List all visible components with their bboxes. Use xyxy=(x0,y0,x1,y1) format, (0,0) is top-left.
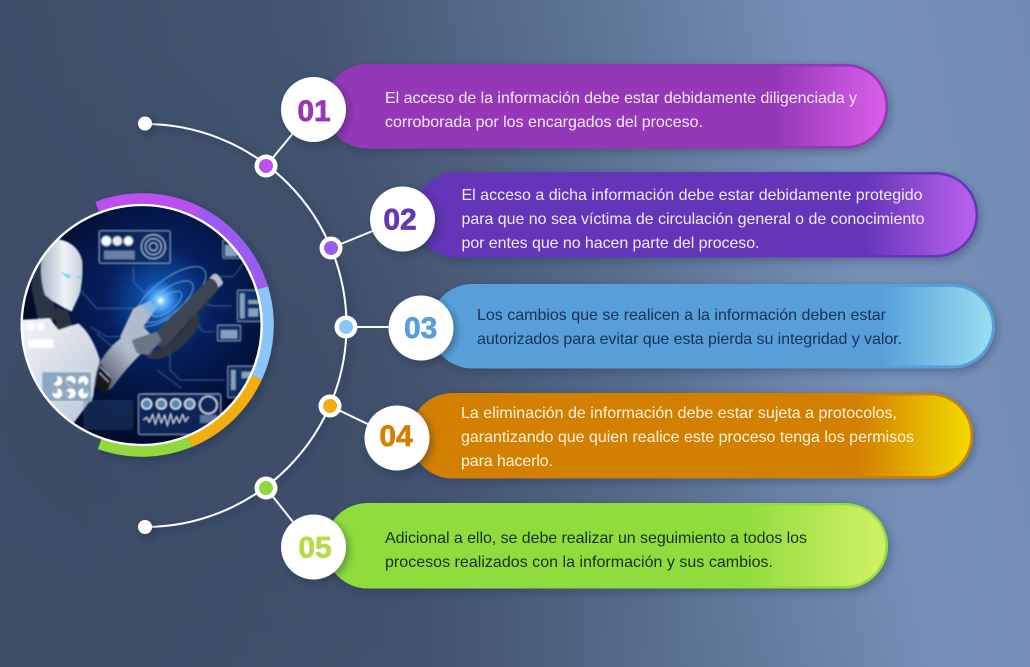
robot neck xyxy=(55,307,73,330)
photo white ring xyxy=(22,205,262,445)
step 5 text: procesos realizados con la información y sus cambios. xyxy=(385,554,773,571)
step 1 text: El acceso de la información debe estar debidamente diligenciada y xyxy=(385,90,857,107)
badge 01: 01 xyxy=(297,95,331,128)
step 5 text xyxy=(385,530,807,571)
chest holographic panel xyxy=(27,323,54,348)
step 2 text xyxy=(462,187,925,252)
badge 03 xyxy=(388,296,454,360)
robot arm and hand xyxy=(97,337,142,390)
robot torso xyxy=(17,318,100,423)
badge 02 xyxy=(370,186,435,252)
step 5 pill xyxy=(326,504,887,587)
robot head xyxy=(41,239,83,312)
step 2 text: por entes que no hacen parte del proceso. xyxy=(462,235,760,252)
node 1 xyxy=(254,154,278,178)
step 4 text: para hacerlo. xyxy=(461,453,553,470)
robot back of head xyxy=(32,250,57,320)
rings on tablet xyxy=(137,265,208,328)
badge 02: 02 xyxy=(383,204,417,236)
badge 04 xyxy=(364,406,430,470)
step 1 pill xyxy=(326,65,887,147)
node 2 xyxy=(320,236,342,260)
tablet glow xyxy=(142,282,179,319)
node 5 xyxy=(254,476,278,500)
step 4 text: garantizando que quien realice este proceso tenga los permisos xyxy=(461,429,914,446)
step 4 text: La eliminación de información debe estar sujeta a protocolos, xyxy=(461,405,897,422)
step 1 text xyxy=(385,90,857,131)
segmented colour ring around photo xyxy=(97,199,268,451)
arc end dots xyxy=(138,116,152,534)
badge 04: 04 xyxy=(379,420,413,453)
lower holographic panel xyxy=(138,394,221,435)
step 2 text: para que no sea víctima de circulación general o de conocimiento xyxy=(462,211,925,228)
step 4 text xyxy=(461,405,914,470)
tablet xyxy=(156,277,222,348)
top holographic panel xyxy=(99,231,170,263)
connectors from nodes to number badges xyxy=(266,109,421,547)
step 3 text: Los cambios que se realicen a la información deben estar xyxy=(477,307,887,324)
step 2 text: El acceso a dicha información debe estar debidamente protegido xyxy=(462,187,923,204)
circuit lines xyxy=(80,263,243,393)
step 5 text: Adicional a ello, se debe realizar un seguimiento a todos los xyxy=(385,530,807,547)
pie-chart panel xyxy=(42,372,92,402)
badge 03: 03 xyxy=(404,312,437,345)
right panels xyxy=(217,240,264,398)
step 2 pill xyxy=(415,173,977,256)
step 3 text xyxy=(477,307,902,348)
step 3 pill xyxy=(432,286,994,367)
step 3 text: autorizados para evitar que esta pierda su integridad y valor. xyxy=(477,331,902,348)
city lights bokeh xyxy=(83,400,133,430)
node 4 xyxy=(318,394,342,418)
node 3 xyxy=(334,316,358,338)
step 4 pill xyxy=(411,394,972,477)
timeline arc xyxy=(145,124,346,527)
step 1 text: corroborada por los encargados del proceso. xyxy=(385,114,703,131)
badge 05: 05 xyxy=(298,532,332,564)
photo: robot with tablet xyxy=(17,200,267,450)
badge 01 xyxy=(281,77,346,142)
badge 05 xyxy=(281,514,346,580)
